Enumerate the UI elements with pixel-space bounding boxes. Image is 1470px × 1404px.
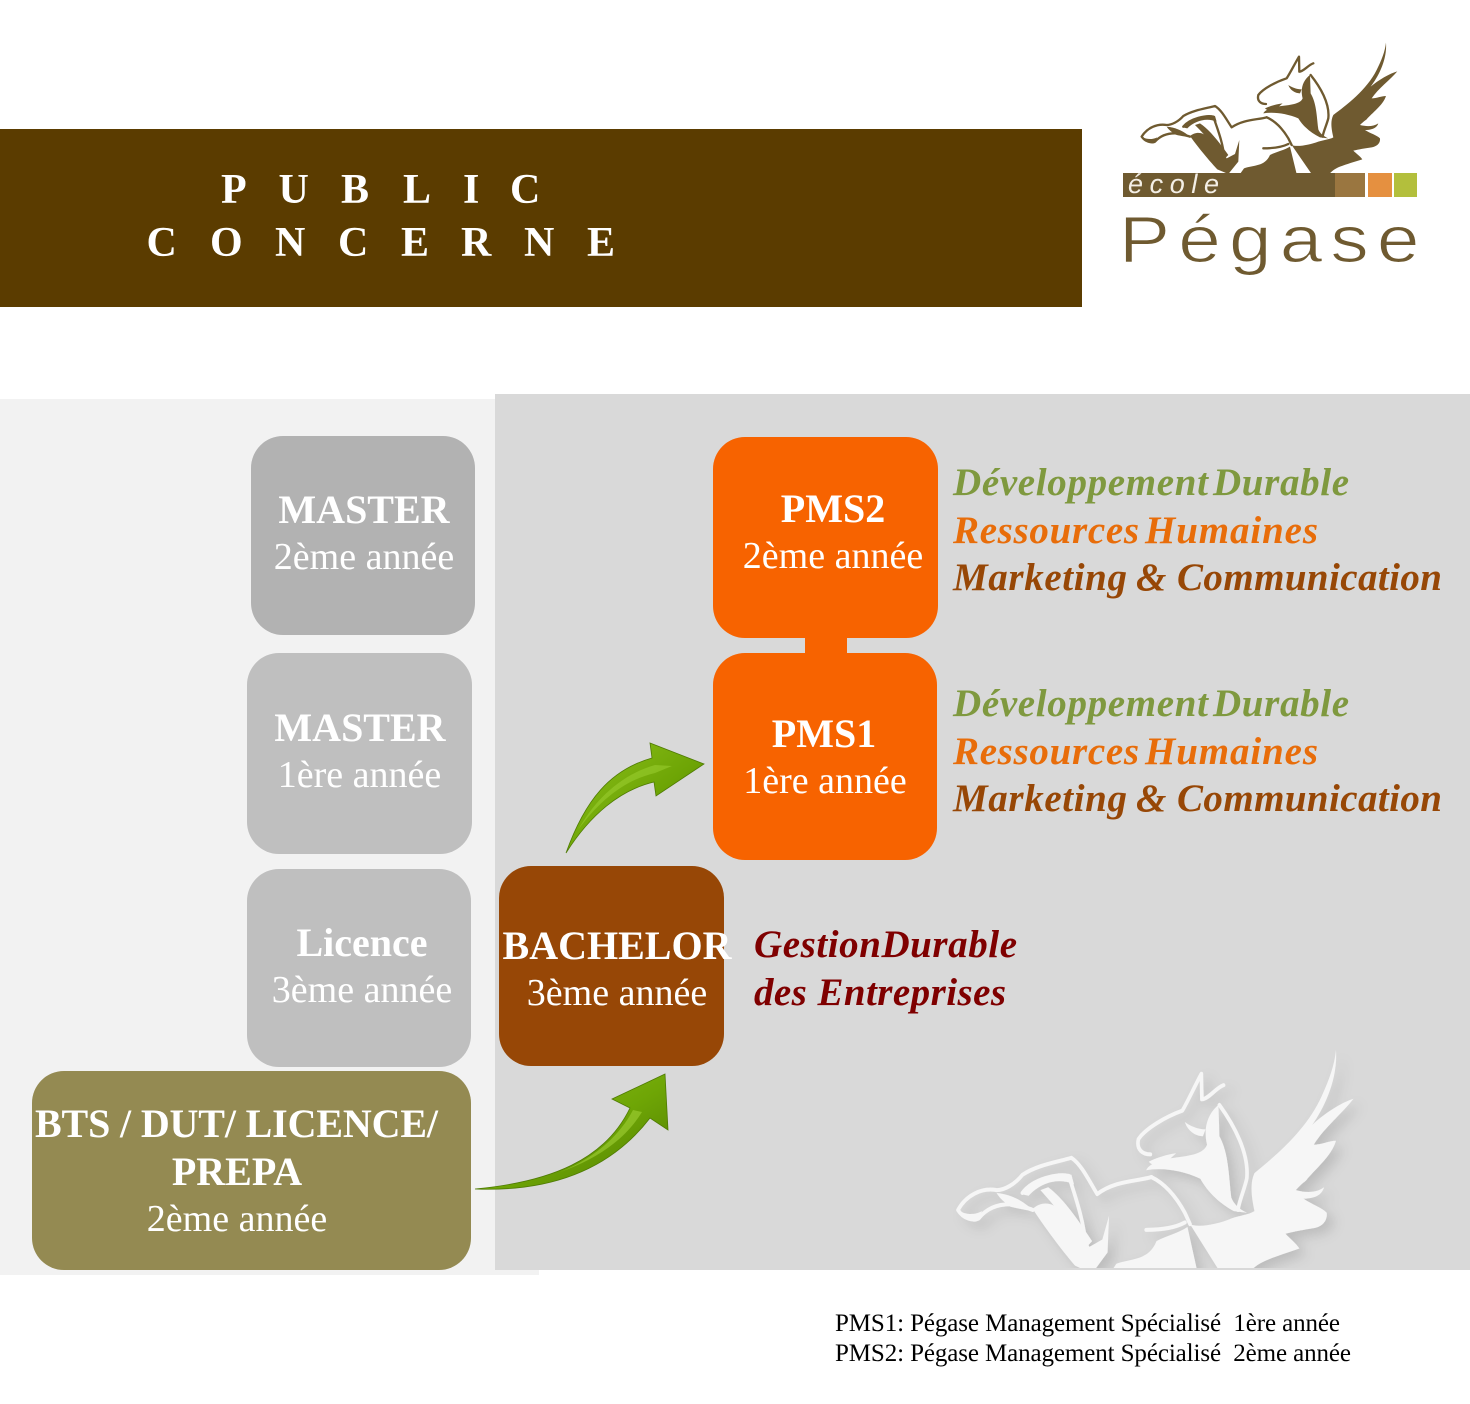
specialities PMS1: Ressources <box>952 730 1139 773</box>
speciality Bachelor: des Entreprises <box>754 971 1006 1014</box>
box: Licence 3ème année <box>247 869 471 1067</box>
box: PMS2: PMS2 <box>781 486 885 531</box>
speciality Bachelor <box>754 923 1017 1014</box>
speciality Bachelor: GestionDurable <box>754 923 1017 966</box>
specialities PMS1: Communication <box>1177 777 1442 820</box>
box: Master 1ère année <box>247 653 472 854</box>
specialities PMS2: Développement <box>952 461 1209 504</box>
specialities PMS1: Marketing <box>952 777 1127 820</box>
panel: current level <box>0 399 539 1275</box>
box: Master 1ère année: MASTER <box>274 705 447 750</box>
logo: école Pégase <box>1119 43 1419 277</box>
box: BTS DUT Licence Prepa: 2ème année <box>147 1198 327 1240</box>
connector between PMS boxes <box>805 630 847 660</box>
box: BTS DUT Licence Prepa <box>32 1071 471 1270</box>
box: PMS1 <box>713 653 937 860</box>
watermark: winged horse <box>958 1050 1354 1274</box>
footnote: PMS1: Pégase Management Spécialisé 1ère année <box>835 1310 1340 1337</box>
box: Licence 3ème année: 3ème année <box>272 969 452 1011</box>
specialities PMS1: & <box>1136 777 1166 820</box>
panel: Pégase programme <box>495 394 1470 1270</box>
footnote: PMS2: Pégase Management Spécialisé 2ème année <box>835 1340 1351 1367</box>
logo band <box>1123 173 1335 197</box>
box: PMS1: PMS1 <box>772 711 876 756</box>
arrow: BTS to Bachelor <box>475 1074 668 1189</box>
specialities PMS1: Développement <box>952 682 1209 725</box>
specialities PMS2: Humaines <box>1144 509 1318 552</box>
title: PUBLIC <box>221 167 540 213</box>
title <box>146 167 615 266</box>
specialities PMS1: Humaines <box>1144 730 1318 773</box>
specialities PMS2: Marketing <box>952 556 1127 599</box>
box: PMS2: 2ème année <box>743 535 923 577</box>
specialities PMS1: Durable <box>1212 682 1349 725</box>
footnote <box>835 1310 1351 1367</box>
logo horse emblem <box>1142 43 1397 174</box>
box: Licence 3ème année: Licence <box>296 920 428 965</box>
box: BTS DUT Licence Prepa: PREPA <box>172 1149 302 1194</box>
specialities PMS2: Durable <box>1212 461 1349 504</box>
specialities PMS1 <box>952 682 1442 820</box>
box: BTS DUT Licence Prepa: BTS / DUT/ LICENCE/ <box>35 1101 439 1146</box>
logo colour squares <box>1335 173 1417 197</box>
box: Bachelor 3ème année: 3ème année <box>527 972 707 1014</box>
box: Bachelor 3ème année <box>499 866 733 1066</box>
specialities PMS2: Communication <box>1177 556 1442 599</box>
box: Master 2ème année <box>251 436 475 635</box>
box: Master 2ème année: MASTER <box>278 487 451 532</box>
specialities PMS2: Ressources <box>952 509 1139 552</box>
box: Master 1ère année: 1ère année <box>278 754 441 796</box>
box: PMS2 <box>713 437 938 638</box>
header banner <box>0 129 1082 307</box>
box: Master 2ème année: 2ème année <box>274 536 454 578</box>
logo word Pégase: Pégase <box>1119 203 1419 277</box>
specialities PMS2 <box>952 461 1442 599</box>
box: Bachelor 3ème année: BACHELOR <box>503 923 733 968</box>
logo word école: école <box>1128 169 1219 199</box>
specialities PMS2: & <box>1136 556 1166 599</box>
box: PMS1: 1ère année <box>743 760 907 802</box>
arrow: Bachelor to PMS1 <box>566 743 704 853</box>
title: CONCERNE <box>146 220 615 266</box>
